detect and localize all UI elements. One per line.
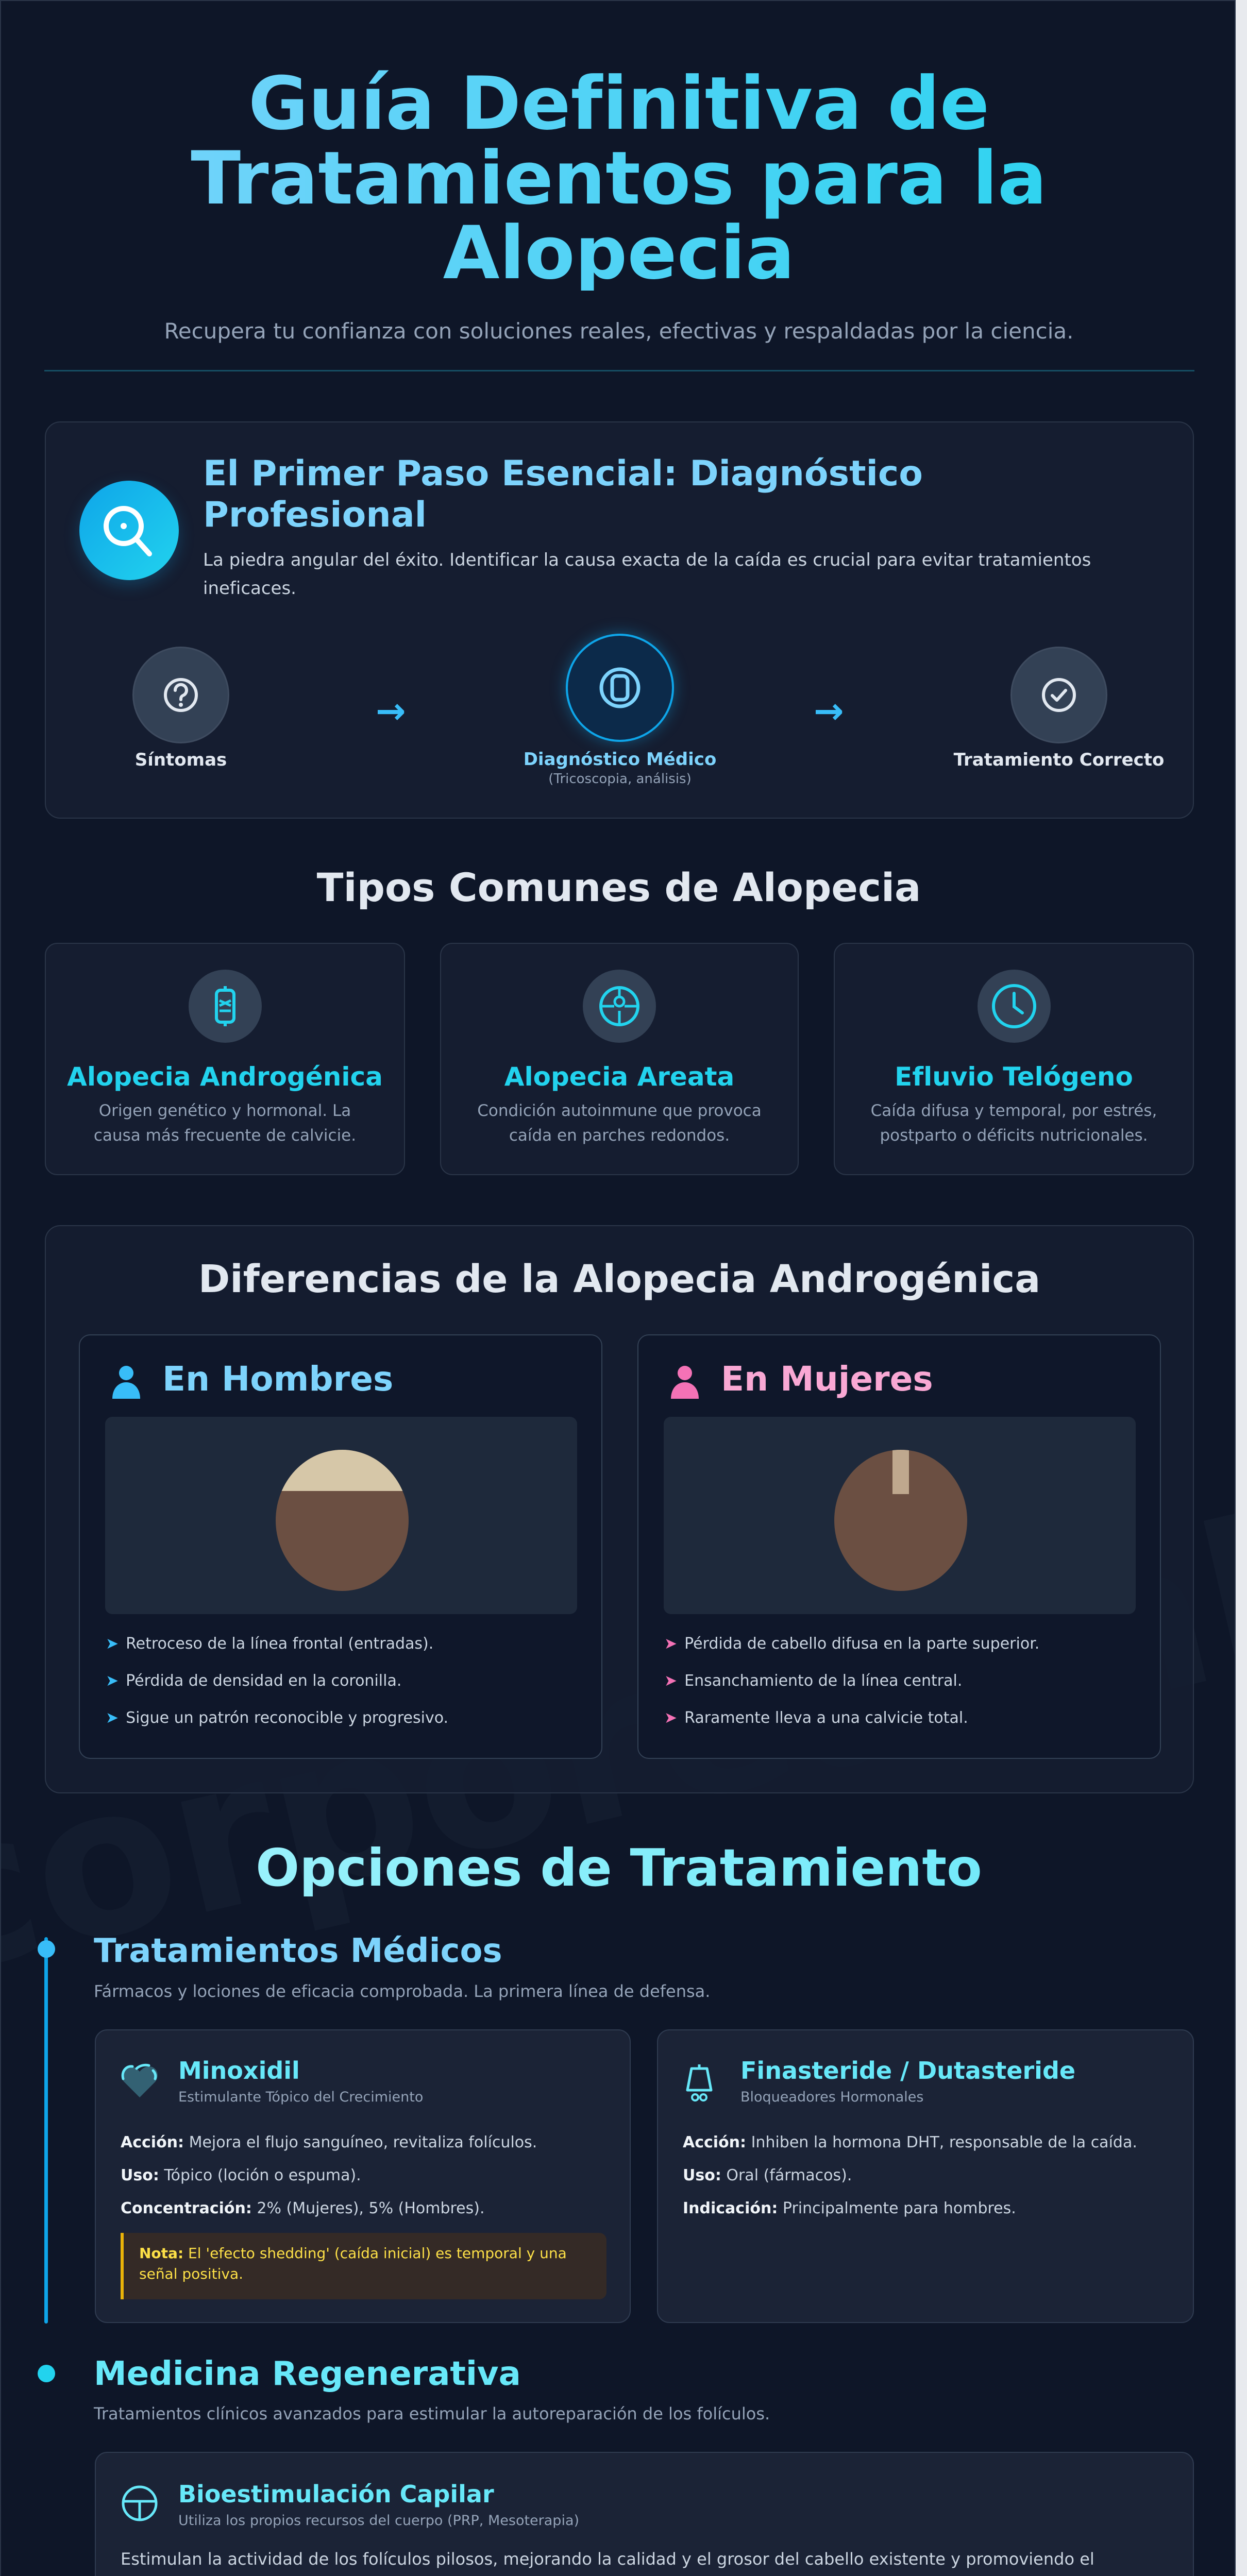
- callout: nota: [121, 2233, 606, 2299]
- title: Alopecia: [443, 211, 795, 296]
- bullet list: [106, 1635, 448, 1727]
- icon: dna: [189, 970, 262, 1043]
- step: tratamiento correcto: Tratamiento Correcto: [954, 750, 1164, 770]
- icon: clock: [977, 970, 1050, 1043]
- details: Uso: Tópico (loción o espuma).: [121, 2166, 361, 2184]
- details: Concentración: 2% (Mujeres), 5% (Hombres).: [121, 2199, 485, 2217]
- section heading: médicos: Tratamientos Médicos: [94, 1932, 502, 1970]
- subtitle: Recupera tu confianza con soluciones reales, efectivas y respaldadas por la ciencia.: [164, 318, 1073, 344]
- card: bioestimulación: Utiliza los propios recursos del cuerpo (PRP, Mesoterapia): [178, 2513, 579, 2529]
- text block: La piedra angular del éxito. Identificar la causa exacta de la caída es crucial para evitar tratamientos ineficaces.: [203, 550, 1091, 599]
- details: Uso: Oral (fármacos).: [683, 2166, 852, 2184]
- heading: Diferencias de la Alopecia Androgénica: [198, 1257, 1040, 1301]
- title: [1, 66, 1237, 291]
- callout: nota: Nota: El 'efecto shedding' (caída inicial) es temporal y una señal positiva.: [139, 2245, 567, 2282]
- title: Bioestimulación Capilar: [178, 2480, 494, 2508]
- icon: globe: [122, 2485, 158, 2521]
- bullet list: ➤ Sigue un patrón reconocible y progresivo.: [106, 1709, 448, 1727]
- bullet list: ➤ Ensanchamiento de la línea central.: [664, 1672, 962, 1690]
- card: areata: Condición autoinmune que provoca caída en parches redondos.: [477, 1101, 762, 1145]
- card: finasteride: [657, 2029, 1194, 2323]
- arrow: →: [376, 690, 406, 732]
- bullet list: [664, 1635, 1039, 1727]
- heading: [203, 453, 923, 535]
- step: diagnóstico médico: [524, 625, 716, 787]
- arrow: →: [814, 690, 844, 732]
- heading: En Hombres: [162, 1359, 393, 1399]
- title: Minoxidil: [178, 2057, 300, 2084]
- card: androgénica: Alopecia Androgénica: [67, 1062, 383, 1092]
- icon: person: [112, 1366, 140, 1399]
- step: síntomas: Síntomas: [135, 750, 227, 770]
- icon: search: [79, 481, 179, 580]
- card: androgénica: [45, 943, 405, 1175]
- card: minoxidil: Estimulante Tópico del Crecimiento: [178, 2089, 423, 2105]
- panel: diagnóstico: (Tricoscopia, análisis): [548, 771, 692, 787]
- details: [683, 2133, 1137, 2217]
- title: Tratamientos para la: [191, 136, 1047, 221]
- illustration: male pattern: [105, 1417, 577, 1614]
- card: finasteride: Bloqueadores Hormonales: [740, 2089, 923, 2105]
- heading: Profesional: [203, 495, 427, 535]
- section heading: regenerativa: Medicina Regenerativa: [94, 2355, 521, 2393]
- timeline dot: [38, 1940, 55, 1958]
- bullet list: ➤ Pérdida de cabello difusa en la parte superior.: [664, 1635, 1039, 1653]
- heading: opciones: Opciones de Tratamiento: [256, 1838, 982, 1898]
- step: síntomas: [132, 647, 229, 770]
- heading: opciones: [1, 1838, 1237, 1898]
- card: minoxidil: [95, 2029, 631, 2323]
- icon: person: [671, 1366, 699, 1399]
- card: bioestimulación: [95, 2452, 1194, 2576]
- heading: tipos: Tipos Comunes de Alopecia: [317, 865, 921, 910]
- card: areata: Alopecia Areata: [504, 1062, 734, 1092]
- icon: flask: [686, 2064, 712, 2102]
- card: efluvio: Efluvio Telógeno: [895, 1062, 1133, 1092]
- title: Guía Definitiva de: [248, 61, 989, 146]
- card: mujeres: [637, 1334, 1161, 1759]
- heading: El Primer Paso Esencial: Diagnóstico: [203, 453, 923, 494]
- bullet list: ➤ Pérdida de densidad en la coronilla.: [106, 1672, 401, 1690]
- illustration: female pattern: [664, 1417, 1136, 1614]
- timeline line: [44, 1937, 48, 2324]
- card: efluvio: [834, 943, 1194, 1175]
- details: Acción: Inhiben la hormona DHT, responsable de la caída.: [683, 2133, 1137, 2151]
- bullet list: ➤ Raramente lleva a una calvicie total.: [664, 1709, 968, 1727]
- panel: diferencias: [45, 1225, 1194, 1793]
- panel: diagnóstico: [45, 421, 1194, 819]
- step: diagnóstico médico: Diagnóstico Médico: [524, 749, 716, 770]
- card: hombres: [79, 1334, 602, 1759]
- details: Indicación: Principalmente para hombres.: [683, 2199, 1016, 2217]
- title: Finasteride / Dutasteride: [740, 2057, 1075, 2084]
- details: Acción: Mejora el flujo sanguíneo, revitaliza folículos.: [121, 2133, 537, 2151]
- icon: heart: [122, 2064, 158, 2097]
- section subtitle: Tratamientos clínicos avanzados para estimular la autoreparación de los folículos.: [94, 2404, 770, 2424]
- icon: target: [583, 970, 656, 1043]
- step: tratamiento correcto: [953, 647, 1164, 770]
- bullet list: ➤ Retroceso de la línea frontal (entradas).: [106, 1635, 433, 1653]
- card: efluvio: Caída difusa y temporal, por estrés, postparto o déficits nutricionales.: [871, 1101, 1157, 1145]
- heading: En Mujeres: [721, 1359, 933, 1399]
- section subtitle: Fármacos y lociones de eficacia comprobada. La primera línea de defensa.: [94, 1981, 710, 2001]
- details: [121, 2133, 537, 2217]
- card: areata: [440, 943, 799, 1175]
- timeline dot: [38, 2365, 55, 2382]
- card: androgénica: Origen genético y hormonal. La causa más frecuente de calvicie.: [94, 1101, 356, 1145]
